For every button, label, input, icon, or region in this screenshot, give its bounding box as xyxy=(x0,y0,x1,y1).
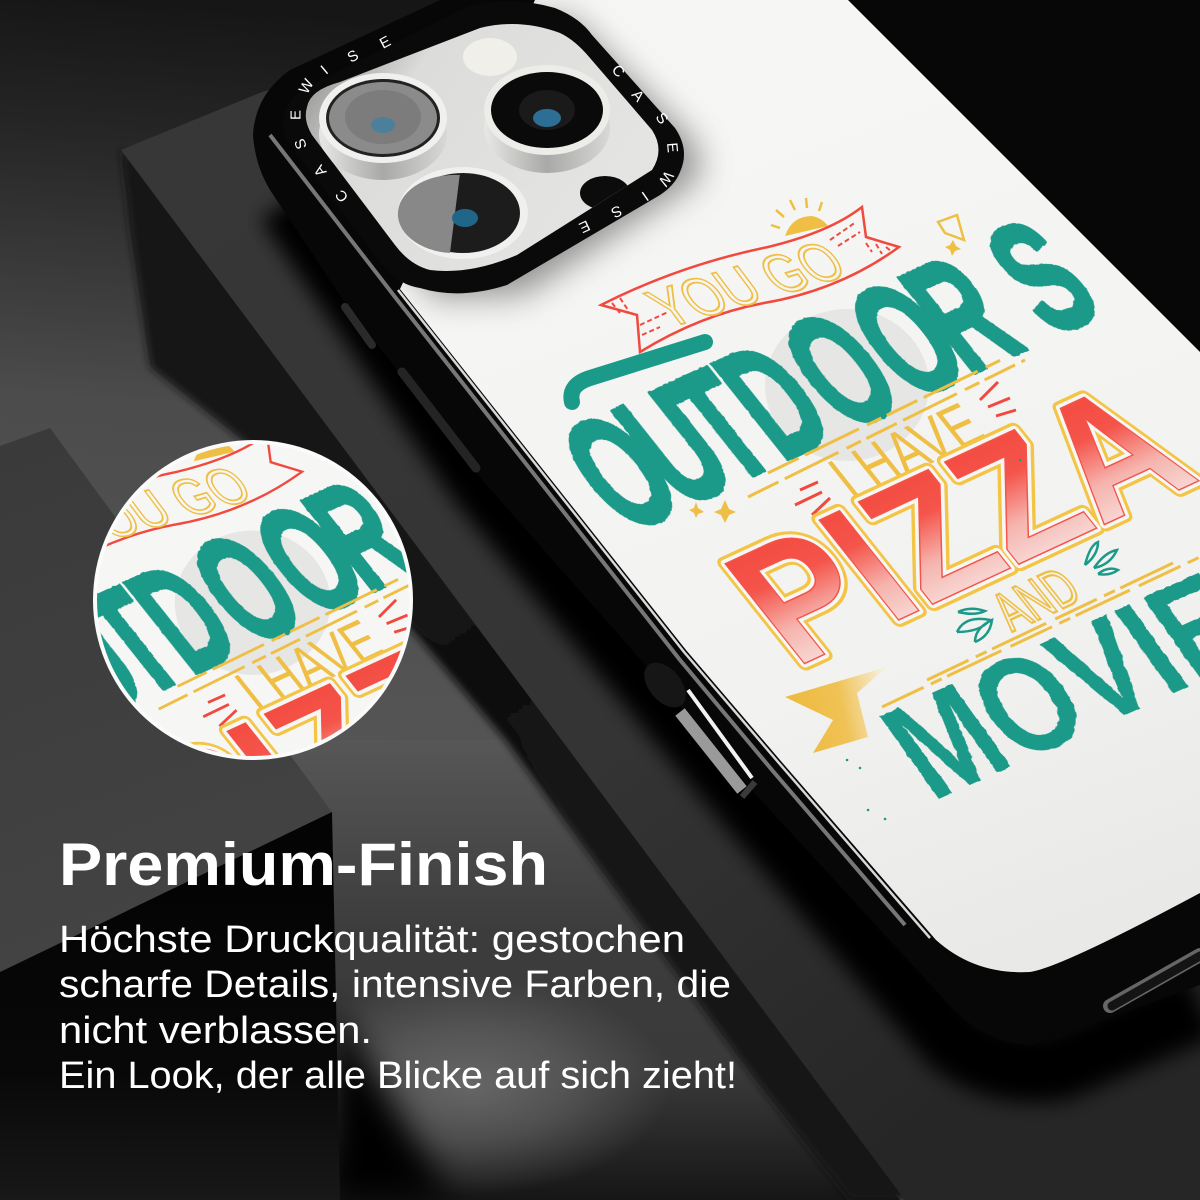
text block xyxy=(59,831,737,1097)
block side face xyxy=(121,150,960,1200)
zoom circle xyxy=(93,440,413,760)
outlined diamond xyxy=(938,215,964,240)
low left block top xyxy=(0,428,332,972)
t crossbar swash xyxy=(571,342,705,402)
floor shadow beside low block xyxy=(330,1000,450,1200)
heading: Premium-Finish xyxy=(59,831,548,898)
teal leaves xyxy=(957,542,1118,642)
magnified pizza: PIZZA xyxy=(104,568,614,901)
lens two xyxy=(484,65,610,173)
magnified i have: I HAVE xyxy=(223,608,396,723)
magnified sun xyxy=(194,446,234,462)
magnified pizza xyxy=(190,640,404,756)
upper right block top xyxy=(1088,45,1200,205)
pizza text xyxy=(717,390,1200,670)
sparkles xyxy=(689,240,961,523)
outdoors text: OUTDOORS xyxy=(527,187,1130,563)
body paragraph: scharfe Details, intensive Farben, die xyxy=(59,964,731,1006)
sun xyxy=(771,198,828,236)
phone case body xyxy=(253,0,1200,1045)
magsafe ghost circle xyxy=(765,309,929,461)
magnified ribbon xyxy=(106,444,305,547)
red dash marks xyxy=(795,382,1016,515)
body paragraph: Höchste Druckqualität: gestochen xyxy=(59,919,685,961)
phone contact shadow xyxy=(290,200,1200,1067)
magnified you go: YOU GO xyxy=(51,456,264,559)
volume button small xyxy=(345,307,372,345)
lens three xyxy=(398,167,528,259)
upper right black recess xyxy=(840,0,1200,480)
magnified pizza: PIZZA xyxy=(104,568,614,901)
i have text: I HAVE xyxy=(815,390,997,511)
and text: AND xyxy=(978,556,1093,642)
casewise label left: CASEWISE xyxy=(288,33,394,205)
phone inner bright line xyxy=(398,290,930,938)
magnified ghost circle xyxy=(175,531,331,675)
artwork on phone xyxy=(527,187,1200,828)
ribbon banner xyxy=(601,207,899,352)
yellow rule lines upper xyxy=(748,358,1025,497)
circle ring xyxy=(93,440,413,760)
you go text: YOU GO xyxy=(635,231,859,339)
ink speckles xyxy=(846,458,1022,820)
yellow rule lines lower xyxy=(882,557,1200,707)
body paragraph xyxy=(59,919,737,1097)
magnified rules xyxy=(159,577,422,709)
charging port xyxy=(1110,955,1200,1006)
body paragraph: Ein Look, der alle Blicke auf sich zieht! xyxy=(59,1055,737,1097)
body paragraph: nicht verblassen. xyxy=(59,1010,372,1052)
phone outer rim reflection xyxy=(270,135,905,925)
floor glow xyxy=(270,975,670,1195)
camera island xyxy=(283,1,684,293)
magnified dash marks xyxy=(203,600,413,726)
magnified pizza: PIZZA xyxy=(104,568,614,901)
island shadow on back xyxy=(299,17,700,298)
island bumper xyxy=(283,1,684,293)
lens one xyxy=(319,73,447,180)
volume button long xyxy=(402,372,476,468)
microphone xyxy=(580,176,628,208)
flash xyxy=(463,38,517,76)
power button silver xyxy=(680,690,755,797)
lightning flag xyxy=(785,667,887,753)
circle inner xyxy=(97,444,409,756)
casewise label right: CASEWISE xyxy=(576,62,681,236)
lit floor xyxy=(290,740,900,1200)
island glass xyxy=(306,24,658,271)
low left block front xyxy=(0,812,340,1200)
upper right wall xyxy=(1030,0,1200,150)
power button recess xyxy=(636,655,694,715)
ribbon hatching xyxy=(612,222,892,335)
phone white back xyxy=(400,0,1200,972)
